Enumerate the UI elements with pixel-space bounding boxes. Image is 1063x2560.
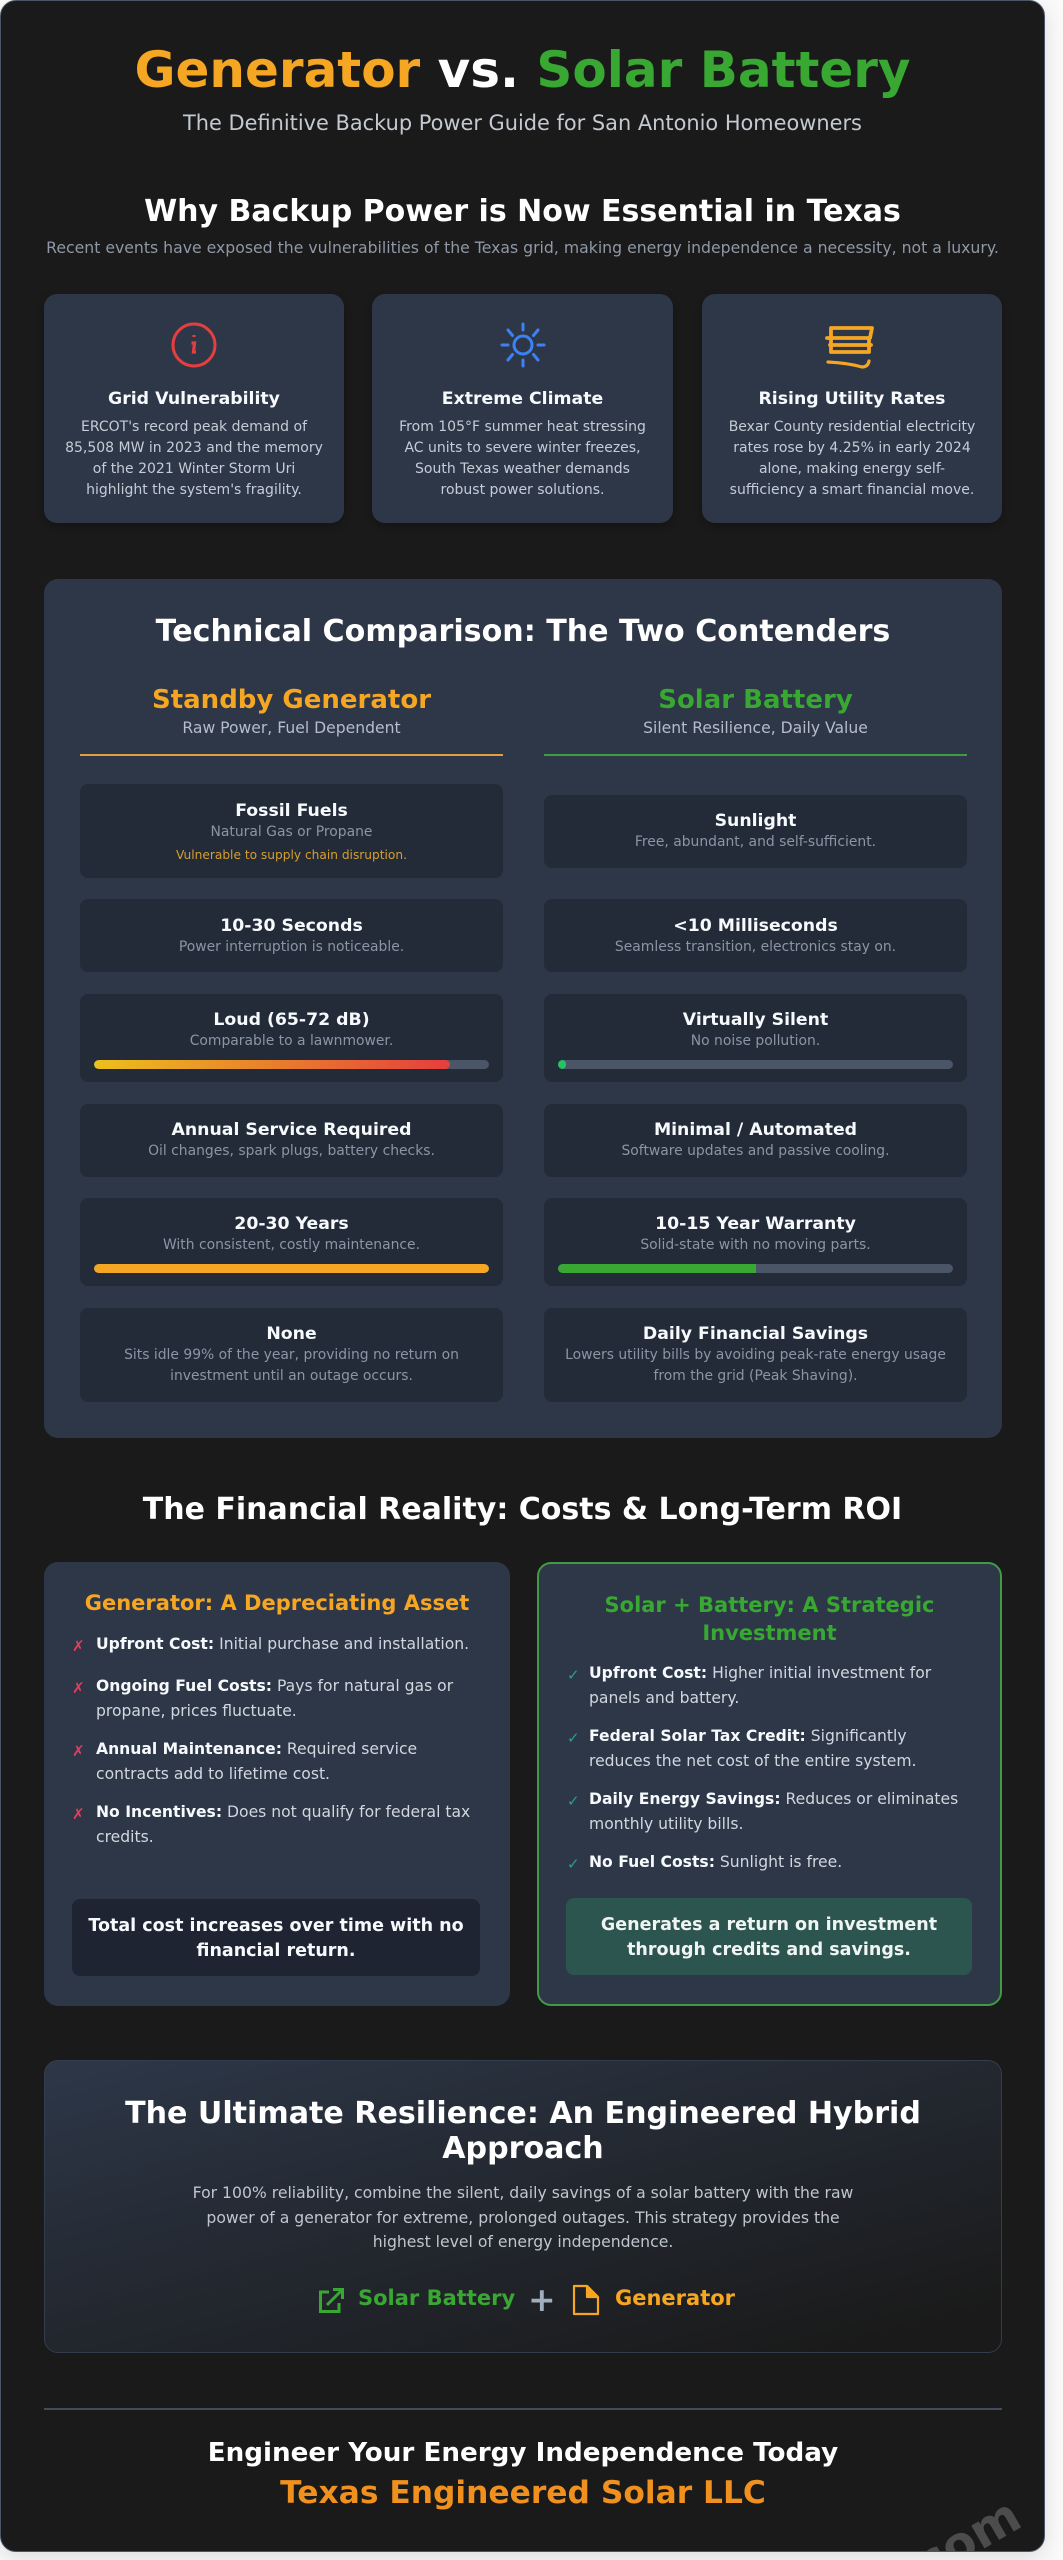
callout text	[88, 1916, 464, 1960]
check mark: ✓	[567, 1666, 580, 1684]
list item: tax credit	[567, 1727, 917, 1770]
detail: investment until an outage occurs.	[170, 1368, 413, 1384]
panel heading: Solar + Battery: A Strategic	[605, 1593, 934, 1617]
card title: Rising Utility Rates	[758, 389, 945, 409]
item text	[589, 1790, 958, 1832]
item text: Upfront Cost: Higher initial investment for	[589, 1664, 931, 1682]
item text: No Incentives: Does not qualify for federal tax	[96, 1803, 470, 1821]
list item: upfront	[567, 1664, 932, 1706]
item text	[96, 1740, 417, 1782]
label: Loud (65-72 dB)	[213, 1010, 370, 1030]
panel heading	[605, 1593, 934, 1645]
card text	[729, 419, 975, 498]
bar: noise level	[558, 1060, 953, 1069]
bar: noise level	[94, 1060, 489, 1069]
paragraph: power of a generator for extreme, prolonged outages. This strategy provides the	[206, 2208, 840, 2226]
card text	[399, 419, 646, 498]
item text: Ongoing Fuel Costs: Pays for natural gas or	[96, 1677, 453, 1695]
paragraph: For 100% reliability, combine the silent, daily savings of a solar battery with the raw	[193, 2183, 853, 2202]
icon: document	[572, 2284, 600, 2316]
cross mark: ✗	[72, 1679, 85, 1697]
cross mark: ✗	[72, 1742, 85, 1760]
list item: fuel	[72, 1677, 454, 1720]
column subtitle: Silent Resilience, Daily Value	[643, 719, 868, 737]
card title: Grid Vulnerability	[108, 389, 280, 409]
card text: robust power solutions.	[441, 482, 604, 498]
subtitle: The Definitive Backup Power Guide for San Antonio Homeowners	[183, 111, 862, 135]
icon: stacked bills	[825, 326, 874, 369]
item text: monthly utility bills.	[589, 1814, 743, 1832]
label: 10-30 Seconds	[220, 916, 363, 936]
detail: Natural Gas or Propane	[211, 824, 372, 840]
footer	[44, 2408, 1002, 2518]
label: 20-30 Years	[234, 1214, 349, 1234]
callout text: financial return.	[196, 1940, 356, 1960]
column header: solar	[544, 681, 967, 756]
intro text: Recent events have exposed the vulnerabilities of the Texas grid, making energy independence a necessity, not a luxury.	[46, 238, 999, 257]
card text: of the 2021 Winter Storm Uri	[93, 461, 295, 477]
panel: generator financials	[44, 1562, 510, 2006]
callout text	[601, 1915, 937, 1960]
card text: rates rose by 4.25% in early 2024	[733, 440, 971, 456]
heading: financial reality: The Financial Reality: Costs & Long-Term ROI	[143, 1492, 902, 1527]
detail: Software updates and passive cooling.	[621, 1143, 890, 1159]
row: lifespan generator	[80, 1198, 503, 1286]
panel: hybrid approach	[44, 2060, 1002, 2353]
row: fossil fuels	[80, 784, 503, 878]
heading	[125, 2096, 921, 2166]
item text	[589, 1727, 917, 1770]
item text	[589, 1664, 932, 1706]
panel: rising utility rates	[702, 294, 1002, 523]
card text: 85,508 MW in 2023 and the memory	[65, 440, 323, 456]
row: noise solar	[544, 994, 967, 1082]
row: maintenance solar	[544, 1104, 967, 1177]
label: Minimal / Automated	[654, 1120, 857, 1140]
bar: lifespan	[94, 1264, 489, 1273]
list item: maintenance	[72, 1740, 417, 1782]
plus sign: +	[528, 2280, 556, 2319]
card text: ERCOT's record peak demand of	[81, 419, 307, 435]
detail: With consistent, costly maintenance.	[163, 1237, 420, 1253]
icon: external link	[319, 2288, 344, 2313]
item text	[96, 1677, 454, 1720]
label: <10 Milliseconds	[673, 916, 838, 936]
list item: savings	[567, 1790, 958, 1832]
footer tagline: Engineer Your Energy Independence Today	[208, 2438, 838, 2468]
detail: Power interruption is noticeable.	[179, 939, 404, 955]
label: Daily Financial Savings	[643, 1324, 868, 1344]
heading: Technical Comparison: The Two Contenders	[156, 614, 890, 649]
bar: lifespan	[558, 1264, 953, 1273]
card text: AC units to severe winter freezes,	[404, 440, 641, 456]
column title: Standby Generator	[152, 685, 431, 715]
heading: The Ultimate Resilience: An Engineered Hybrid	[125, 2096, 921, 2131]
detail: Sits idle 99% of the year, providing no return on	[124, 1347, 459, 1363]
detail: No noise pollution.	[691, 1033, 820, 1049]
detail	[565, 1347, 946, 1384]
paragraph: highest level of energy independence.	[373, 2232, 673, 2251]
card text: highlight the system's fragility.	[86, 482, 302, 498]
panel: extreme climate	[372, 294, 673, 523]
item text: reduces the net cost of the entire system.	[589, 1752, 917, 1770]
cross mark: ✗	[72, 1637, 85, 1655]
detail: Comparable to a lawnmower.	[190, 1033, 393, 1049]
card title: Extreme Climate	[442, 389, 603, 409]
column header: generator	[80, 681, 503, 756]
label: Virtually Silent	[683, 1010, 828, 1030]
label: solar battery: Solar Battery	[358, 2286, 515, 2310]
list item: fuel	[567, 1853, 842, 1873]
card text: sufficiency a smart financial move.	[730, 482, 974, 498]
detail: Lowers utility bills by avoiding peak-rate energy usage	[565, 1347, 946, 1363]
icon: info circle	[172, 322, 216, 368]
item text: Annual Maintenance: Required service	[96, 1740, 417, 1758]
card text: Bexar County residential electricity	[729, 419, 975, 435]
row: noise generator	[80, 994, 503, 1082]
list item: upfront	[72, 1635, 469, 1655]
item text: Federal Solar Tax Credit: Significantly	[589, 1727, 907, 1745]
list item: incentives	[72, 1803, 470, 1846]
warning: Vulnerable to supply chain disruption.	[176, 848, 407, 862]
card text: South Texas weather demands	[415, 461, 630, 477]
row: maintenance generator	[80, 1104, 503, 1177]
detail	[124, 1347, 459, 1384]
item text: Daily Energy Savings: Reduces or eliminates	[589, 1790, 958, 1808]
icon: sun	[500, 322, 546, 368]
label: 10-15 Year Warranty	[655, 1214, 856, 1234]
row: sunlight	[544, 795, 967, 868]
callout	[566, 1898, 972, 1975]
paragraph	[193, 2183, 853, 2251]
cross mark: ✗	[72, 1805, 85, 1823]
card text	[65, 419, 323, 498]
title: Generator vs. Solar Battery	[134, 41, 911, 99]
company name: Texas Engineered Solar LLC	[280, 2475, 766, 2511]
label: Annual Service Required	[172, 1120, 411, 1140]
item text: panels and battery.	[589, 1688, 739, 1706]
item text: credits.	[96, 1828, 154, 1846]
callout text: Generates a return on investment	[601, 1915, 937, 1935]
detail: Free, abundant, and self-sufficient.	[635, 834, 876, 850]
row: start time generator	[80, 899, 503, 972]
detail: Seamless transition, electronics stay on.	[615, 939, 896, 955]
heading: Approach	[442, 2131, 604, 2166]
heading: why backup power: Why Backup Power is Now Essential in Texas	[144, 194, 901, 229]
label: Sunlight	[715, 811, 796, 831]
row: return generator	[80, 1308, 503, 1402]
detail: from the grid (Peak Shaving).	[653, 1368, 858, 1384]
label: None	[266, 1324, 317, 1344]
label: generator: Generator	[615, 2286, 735, 2310]
card text: alone, making energy self-	[759, 461, 945, 477]
check mark: ✓	[567, 1792, 580, 1810]
callout text: through credits and savings.	[627, 1940, 911, 1960]
callout text: Total cost increases over time with no	[88, 1916, 464, 1936]
item text: contracts add to lifetime cost.	[96, 1764, 330, 1782]
label: Fossil Fuels	[235, 801, 348, 821]
panel heading: Investment	[702, 1621, 837, 1645]
item text: No Fuel Costs: Sunlight is free.	[589, 1853, 842, 1871]
column title: Solar Battery	[658, 685, 853, 715]
card text: From 105°F summer heat stressing	[399, 419, 646, 435]
row: start time solar	[544, 899, 967, 972]
detail: Oil changes, spark plugs, battery checks.	[148, 1143, 435, 1159]
item text: Upfront Cost: Initial purchase and installation.	[96, 1635, 469, 1653]
item text	[96, 1803, 470, 1846]
check mark: ✓	[567, 1855, 580, 1873]
callout	[72, 1899, 480, 1976]
item text: propane, prices fluctuate.	[96, 1702, 297, 1720]
row: lifespan solar	[544, 1198, 967, 1286]
column subtitle: Raw Power, Fuel Dependent	[182, 719, 401, 737]
panel: technical comparison	[44, 579, 1002, 1438]
detail: Solid-state with no moving parts.	[640, 1237, 871, 1253]
panel: solar financials	[537, 1562, 1002, 2006]
panel: grid vulnerability	[44, 294, 344, 523]
panel heading: Generator: A Depreciating Asset	[85, 1591, 469, 1615]
row: return solar	[544, 1308, 967, 1402]
check mark: ✓	[567, 1729, 580, 1747]
